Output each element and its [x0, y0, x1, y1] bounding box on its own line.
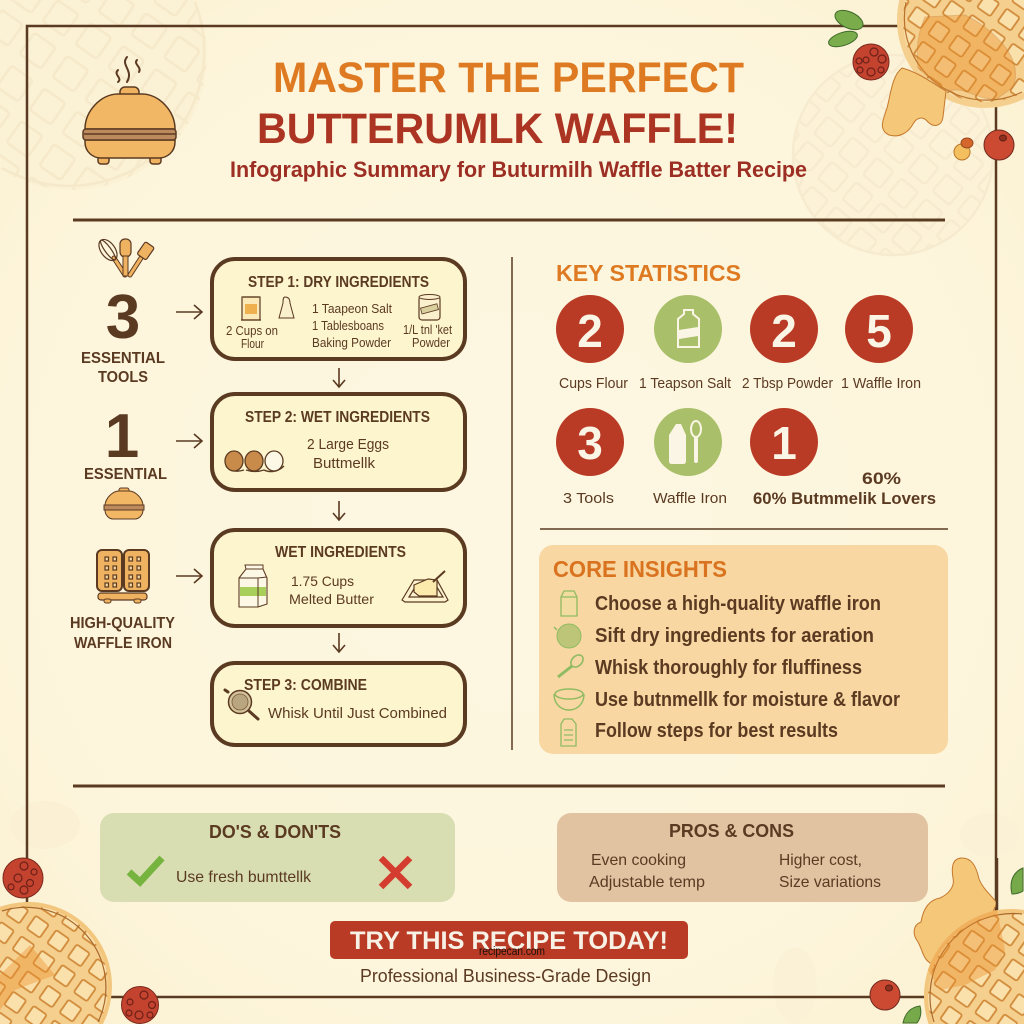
label: high-quality waffle iron	[70, 615, 175, 652]
title	[257, 54, 744, 153]
panel: step 1 dry ingredients: 1/L tnl 'ket	[403, 323, 452, 337]
divider	[73, 218, 945, 222]
panel: core insights: Whisk thoroughly for fluffiness	[595, 657, 862, 679]
button: call to action: TRY THIS RECIPE TODAY!	[350, 927, 668, 955]
stat: 1 and 60 percent lovers: 60%	[862, 469, 901, 488]
stat: 3 tools: 3 Tools	[563, 491, 614, 507]
panel: step 3 combine: Whisk Until Just Combined	[268, 705, 447, 722]
chart: statistic circles	[556, 295, 936, 508]
icon: milk carton	[239, 565, 267, 607]
right divider	[540, 528, 948, 530]
panel: wet ingredients: 1.75 Cups	[291, 573, 354, 589]
arrows: left column to steps	[176, 305, 202, 583]
stat: 2 tbsp powder	[742, 295, 833, 392]
stat: salt: 1 Teapson Salt	[639, 376, 731, 392]
panel: do's and don'ts	[100, 813, 455, 902]
panel: wet ingredients: WET INGREDIENTS	[275, 544, 406, 561]
number: 1 essential	[84, 402, 167, 483]
stat: salt	[639, 295, 731, 392]
panel: step 2 wet ingredients	[212, 394, 465, 490]
stat: 5 waffle iron: 5	[866, 305, 892, 357]
icon: butter dish	[402, 571, 448, 602]
arrow: step 1 to 2	[333, 368, 345, 387]
panel: wet ingredients: Melted Butter	[289, 591, 374, 607]
stat: 2 cups flour: 2	[577, 305, 603, 357]
divider	[73, 784, 945, 788]
panel: pros and cons: PROS & CONS	[669, 820, 794, 841]
icon: sieve	[225, 690, 258, 719]
corner decoration: bottom right waffle, syrup and berries	[870, 858, 1024, 1024]
panel: pros and cons: Higher cost,	[779, 852, 862, 869]
icon: flour bag	[241, 297, 261, 320]
panel: core insights	[539, 545, 948, 754]
heading: key statistics: KEY STATISTICS	[556, 260, 741, 286]
icon: bowl	[554, 689, 584, 710]
icon: checklist	[561, 719, 576, 746]
label: high-quality waffle iron: HIGH-QUALITY	[70, 615, 175, 632]
panel: step 1 dry ingredients: STEP 1: DRY INGREDIENTS	[248, 274, 429, 291]
icon: baking powder can	[419, 294, 440, 320]
arrow: step 2 to wet ingredients	[333, 501, 345, 520]
number: 1 essential: 1	[105, 402, 139, 471]
icon: check mark	[129, 858, 162, 882]
vertical divider	[511, 257, 513, 750]
stat: waffle iron tools	[653, 408, 727, 507]
panel: do's and don'ts: Use fresh bumttellk	[176, 869, 312, 886]
stat: 3 tools	[556, 408, 624, 507]
title: MASTER THE PERFECT	[273, 54, 744, 102]
panel: step 1 dry ingredients: 1 Tablesboans	[312, 319, 384, 333]
panel: core insights: Sift dry ingredients for aeration	[595, 625, 874, 647]
panel: step 2 wet ingredients: STEP 2: WET INGREDIENTS	[245, 409, 430, 426]
panel: pros and cons	[557, 813, 928, 902]
panel: step 1 dry ingredients: Powder	[412, 336, 450, 350]
panel: step 1 dry ingredients: Baking Powder	[312, 336, 391, 350]
icon: carton	[561, 591, 577, 616]
stat: waffle iron tools: Waffle Iron	[653, 491, 727, 507]
watermark: recipecan.com	[479, 946, 545, 958]
panel: wet ingredients	[212, 530, 465, 626]
corner decoration: top right waffle, syrup and berries	[827, 0, 1024, 160]
icon: waffle iron	[97, 550, 149, 603]
panel: step 3 combine	[212, 663, 465, 745]
stat: 2 cups flour	[556, 295, 628, 392]
corner decoration: bottom left waffle and berries	[0, 858, 158, 1024]
icon: eggs	[225, 451, 284, 472]
panel: step 2 wet ingredients: 2 Large Eggs	[307, 437, 389, 453]
button: call to action	[330, 921, 688, 959]
icon: sifter	[554, 624, 581, 648]
stat: 5 waffle iron	[841, 295, 921, 392]
panel: pros and cons: Size variations	[779, 874, 881, 891]
stat: 2 tbsp powder: 2	[771, 305, 797, 357]
number: 1 essential: ESSENTIAL	[84, 466, 167, 483]
number: 3 essential tools	[81, 283, 165, 386]
icon: whisk	[558, 653, 585, 677]
stat: 1 and 60 percent lovers: 60% Butmmelik Lovers	[753, 489, 936, 508]
stat: 3 tools: 3	[577, 417, 603, 469]
panel: pros and cons: Adjustable temp	[589, 874, 705, 891]
panel: core insights: Choose a high-quality waffle iron	[595, 593, 881, 615]
panel: core insights: CORE INSIGHTS	[553, 556, 727, 582]
icon: cross mark	[381, 858, 410, 887]
stat: 2 cups flour: Cups Flour	[559, 376, 628, 392]
stat: 1 and 60 percent lovers	[750, 408, 936, 508]
label: high-quality waffle iron: WAFFLE IRON	[74, 635, 172, 652]
panel: core insights: Follow steps for best results	[595, 720, 838, 742]
number: 3 essential tools: TOOLS	[98, 369, 148, 386]
panel: step 1 dry ingredients: 2 Cups on	[226, 324, 278, 338]
icon: kitchen tools	[95, 236, 155, 276]
stat: 2 tbsp powder: 2 Tbsp Powder	[742, 376, 833, 392]
footer text: Professional Business-Grade Design	[360, 966, 651, 986]
title: BUTTERUMLK WAFFLE!	[257, 105, 738, 153]
arrow: wet ingredients to step 3	[333, 633, 345, 652]
stat: 1 and 60 percent lovers: 1	[771, 417, 797, 469]
icon: salt shaker	[279, 297, 294, 318]
icon: waffle maker with steam	[83, 57, 176, 164]
panel: step 1 dry ingredients: 1 Taapeon Salt	[312, 302, 392, 316]
subtitle: Infographic Summary for Buturmilh Waffle Batter Recipe	[230, 157, 807, 182]
stat: 5 waffle iron: 1 Waffle Iron	[841, 376, 921, 392]
panel: pros and cons: Even cooking	[591, 852, 686, 869]
number: 3 essential tools: ESSENTIAL	[81, 350, 165, 367]
number: 3 essential tools: 3	[106, 283, 140, 352]
panel: left stats column	[70, 236, 175, 652]
icon: small waffle maker	[104, 488, 144, 519]
panel: step 1 dry ingredients	[212, 259, 465, 359]
panel: step 3 combine: STEP 3: COMBINE	[244, 677, 367, 694]
panel: do's and don'ts: DO'S & DON'TS	[209, 821, 341, 842]
panel: step 1 dry ingredients: Flour	[241, 337, 264, 351]
panel: core insights: Use butnmellk for moisture & flavor	[595, 689, 900, 711]
panel: step 2 wet ingredients: Buttmellk	[313, 456, 376, 472]
